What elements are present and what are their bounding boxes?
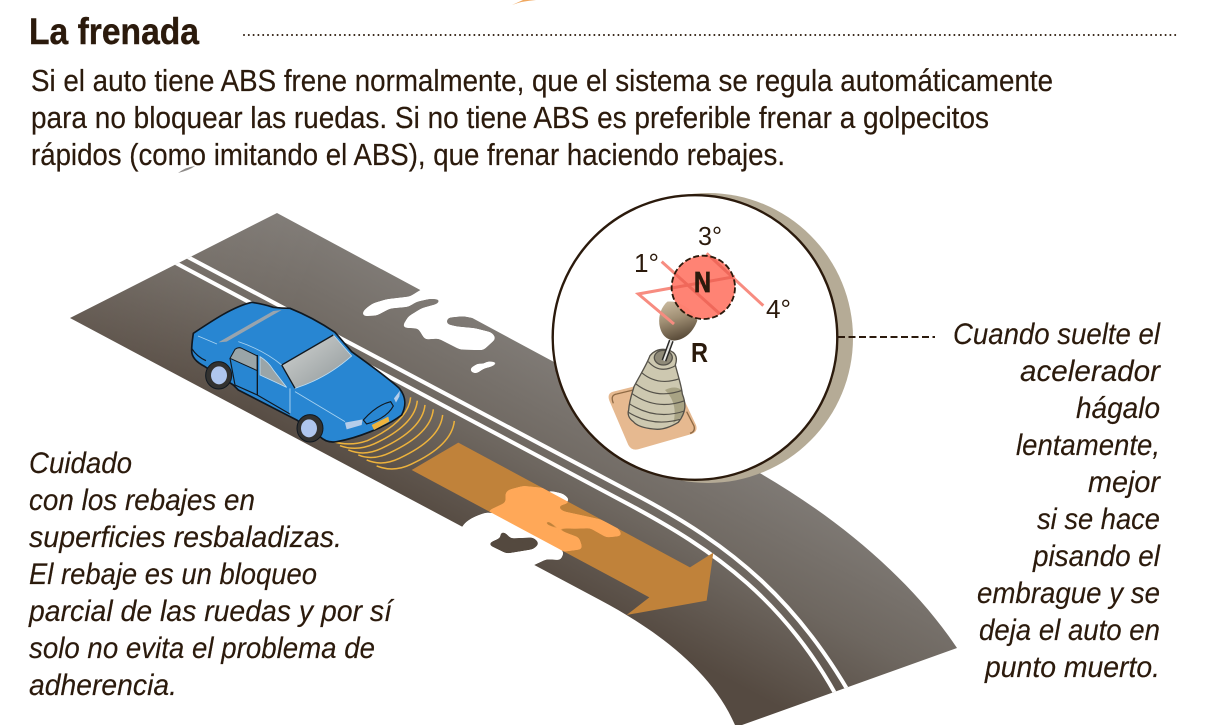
orange water patch [487,486,623,552]
rear window strip [218,310,282,342]
left caption: adherencia. [29,669,177,702]
right caption: lentamente, [1016,429,1160,462]
intro text: para no bloquear las ruedas. Si no tiene ABS es preferible frenar a golpecitos [31,100,989,135]
dotted rule [244,34,1176,36]
intro text: Si el auto tiene ABS frene normalmente, que el sistema se regula automáticamente [31,63,1053,98]
side windows [230,348,257,371]
left caption: Cuidado [29,447,132,480]
gear labels: N [694,267,711,299]
double white lane lines [172,255,860,716]
knob [659,301,697,341]
puddle on the road, top [362,280,501,373]
gear labels: 3° [698,221,722,251]
white puddle on the road, bottom [440,489,570,590]
orange braking arrow [412,443,713,615]
base plate [609,378,697,450]
left caption [28,447,395,702]
intro text: rápidos (como imitando el ABS), que frenar haciendo rebajes. [31,137,785,172]
right caption: hágalo [1076,392,1160,425]
shift pattern lines [638,253,763,324]
door lines and highlights [192,336,345,422]
yellow brake arcs [333,397,454,469]
left caption: El rebaje es un bloqueo [29,558,317,591]
right caption: embrague y se [977,577,1160,610]
gear lever and pattern [609,253,763,450]
right caption: acelerador [1020,355,1161,388]
wheels [206,362,323,442]
right caption: deja el auto en [979,614,1160,647]
dashed leader line [838,336,935,338]
shift lines inside N circle [672,256,734,315]
circle shadow [563,193,853,483]
gear labels: R [691,337,708,368]
road surface [70,213,957,725]
car body [192,302,405,442]
N circle [672,256,735,319]
top orange fragment [512,0,536,5]
small grey fragment [178,166,195,173]
title: La frenada [29,11,199,52]
right caption [953,318,1161,684]
rubber boot [627,349,687,429]
left caption: superficies resbaladizas. [29,521,342,554]
road illustration [70,213,957,725]
right caption: Cuando suelte el [953,318,1161,351]
right caption: pisando el [1032,540,1161,573]
left caption: parcial de las ruedas y por sí [28,595,395,628]
intro text [31,63,1053,172]
left caption: con los rebajes en [29,484,255,517]
left caption: solo no evita el problema de [29,632,375,665]
lever stick [664,341,671,361]
car with yellow brake marks [192,302,454,469]
gear labels: 4° [766,294,791,324]
windshield [282,335,352,388]
right caption: si se hace [1037,503,1160,536]
right caption: punto muerto. [984,651,1160,684]
right caption: mejor [1088,466,1161,499]
headlights, grille and plate [345,391,400,430]
detail circle: gear shifter [553,193,853,483]
white circle [553,195,837,480]
gear labels [634,221,791,368]
gear labels: 1° [634,248,659,278]
